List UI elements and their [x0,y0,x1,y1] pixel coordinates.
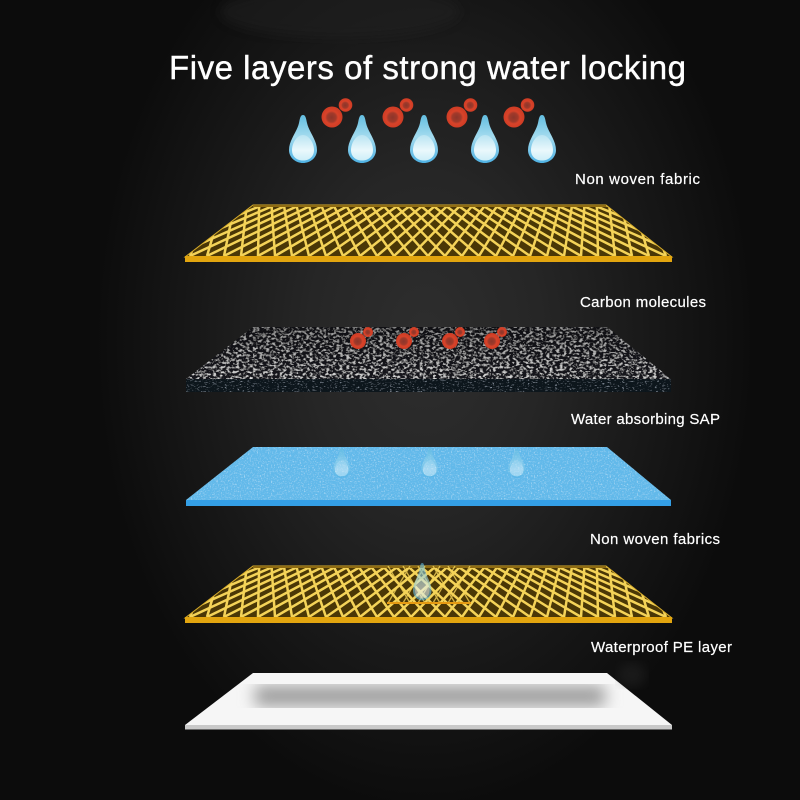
PE front edge [185,725,672,730]
carbon top surface [186,327,671,379]
SAP top surface [186,447,671,500]
icon group: falling water drops [289,115,556,163]
title: Five layers of strong water locking [169,49,686,86]
PE grey shaded band [255,686,605,706]
faint background smudge [220,0,460,38]
icon: fading water drop [413,563,431,600]
icon: carbon molecule 1 [350,327,373,349]
icon: molecule 1 [322,98,352,128]
label: waterproof PE layer: Waterproof PE layer [591,639,732,656]
icon: molecule 3 [446,98,477,128]
icon: molecule 2 [382,98,413,128]
panel: non woven fabrics layer [122,566,734,623]
icon group: red molecules [322,98,534,128]
carbon surface shading [186,327,671,379]
panel: carbon molecules layer [186,327,671,392]
label: water absorbing SAP: Water absorbing SAP [571,411,720,428]
icon: water drop 1 [289,115,317,163]
icon: absorbed drop 1 [333,448,350,478]
icon: water drop 2 [348,115,376,163]
PE top surface [185,673,672,725]
icon: carbon molecule 2 [396,327,419,349]
page background [154,0,732,730]
dense lattice patch [388,566,470,603]
icon: carbon molecule 4 [484,327,507,349]
panel: water absorbing SAP layer [186,447,671,506]
orange line [387,602,471,604]
label: non woven fabric: Non woven fabric [575,171,700,188]
icon: water drop 3 [410,115,438,163]
carbon front edge [186,379,671,392]
icon: water drop 5 [528,115,556,163]
smoke wisp [618,663,646,687]
label: non woven fabrics: Non woven fabrics [590,531,720,548]
icon: absorbed drop 2 [421,448,438,478]
SAP front edge [186,500,671,506]
icon: water drop 4 [471,115,499,163]
icon: absorbed drop 3 [508,448,525,478]
overlay: passing drop on fabric layer [387,563,471,604]
panel: waterproof PE layer [185,663,672,730]
icon: molecule 4 [504,98,534,128]
icon: carbon molecule 3 [442,327,465,349]
panel: non woven fabric layer [122,205,734,262]
label: carbon molecules: Carbon molecules [580,294,706,311]
